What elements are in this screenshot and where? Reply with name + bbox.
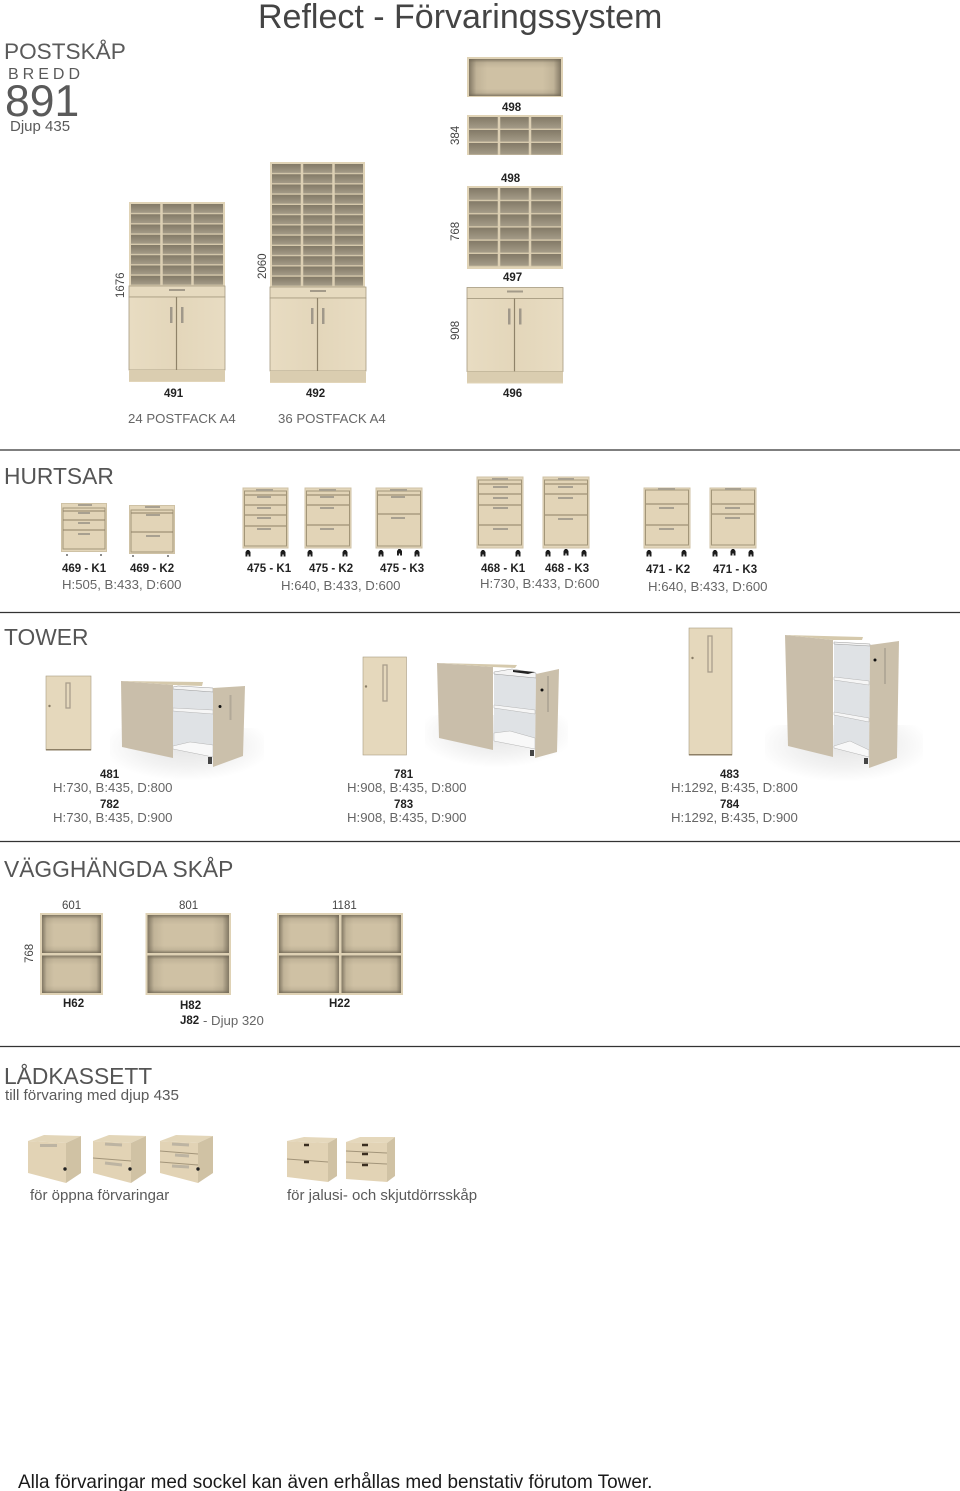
- model numbers: 498: [501, 173, 521, 185]
- drawer captions: [30, 1187, 477, 1204]
- shelf unit 497: [467, 186, 563, 269]
- heading: lådkassett: LÅDKASSETT: [4, 1063, 152, 1089]
- wall cabinet H82: [146, 913, 231, 995]
- pedestal 468-K1: [477, 477, 523, 556]
- pedestal labels: H:505, B:433, D:600: [62, 577, 182, 592]
- shelf unit 498 lower: [467, 115, 563, 155]
- wall cabinet labels: - Djup 320: [203, 1013, 264, 1028]
- tower door 481: [46, 676, 91, 750]
- tower labels: H:730, B:435, D:900: [53, 810, 172, 825]
- tower labels: H:1292, B:435, D:900: [671, 810, 798, 825]
- heading: postskåp: POSTSKÅP: [4, 39, 126, 64]
- width labels: 1181: [332, 900, 357, 912]
- heading: postskåp: Djup 435: [10, 118, 70, 135]
- pedestal labels: 471 - K3: [713, 564, 757, 576]
- dimension labels: 2060: [257, 253, 269, 279]
- tower labels: H:908, B:435, D:800: [347, 780, 466, 795]
- tower labels: 784: [720, 799, 740, 811]
- dimension labels: 908: [450, 321, 462, 340]
- heading: lådkassett: till förvaring med djup 435: [5, 1087, 179, 1104]
- tower labels: H:1292, B:435, D:800: [671, 780, 798, 795]
- model numbers: [164, 102, 522, 400]
- tower labels: [53, 769, 798, 825]
- wall cabinet labels: H22: [329, 998, 350, 1010]
- heading: tower: TOWER: [4, 624, 88, 650]
- cabinet 492: [270, 162, 366, 383]
- heading: postskåp: 891: [5, 77, 79, 126]
- pedestal labels: H:730, B:433, D:600: [480, 576, 600, 591]
- wall cabinet H22: [277, 913, 403, 995]
- wall cabinet labels: J82: [180, 1015, 199, 1027]
- pedestal labels: 475 - K2: [309, 563, 353, 575]
- caption: postfack: 36 POSTFACK A4: [278, 411, 386, 426]
- tower labels: H:730, B:435, D:800: [53, 780, 172, 795]
- pedestal 475-K1: [243, 488, 288, 556]
- tower labels: 481: [100, 769, 120, 781]
- pedestal labels: [62, 563, 768, 594]
- pedestal 471-K2: [644, 488, 690, 556]
- tower open 483: [765, 635, 923, 792]
- tower door 781: [363, 657, 406, 755]
- drawer box 1: [28, 1135, 81, 1183]
- pedestal labels: 475 - K1: [247, 563, 292, 575]
- tower labels: 781: [394, 769, 414, 781]
- model numbers: 498: [502, 102, 522, 114]
- cabinet 491: [129, 202, 225, 382]
- heading: postskåp: [4, 39, 126, 135]
- pedestal labels: 468 - K3: [545, 563, 589, 575]
- width labels: 801: [179, 900, 198, 912]
- drawer box 4: [287, 1137, 337, 1182]
- pedestal 469-K2: [130, 506, 174, 557]
- caption: postfack: 24 POSTFACK A4: [128, 411, 236, 426]
- pedestal labels: H:640, B:433, D:600: [648, 579, 768, 594]
- heading: lådkassett: [4, 1063, 179, 1104]
- drawer captions: för öppna förvaringar: [30, 1187, 169, 1204]
- width labels: 601: [62, 900, 81, 912]
- width labels: [24, 900, 357, 963]
- heading: vägghängda skåp: VÄGGHÄNGDA SKÅP: [4, 856, 233, 882]
- pedestal labels: 475 - K3: [380, 563, 424, 575]
- caption: postfack: [128, 411, 386, 426]
- drawer box 2: [93, 1135, 146, 1183]
- drawer box 3: [160, 1135, 213, 1183]
- width labels: 768: [24, 944, 36, 963]
- heading: hurtsar: HURTSAR: [4, 463, 114, 489]
- pedestal 469-K1: [62, 504, 106, 556]
- pedestal labels: 468 - K1: [481, 563, 526, 575]
- pedestal 475-K2: [305, 488, 351, 556]
- wall cabinet labels: H82: [180, 1000, 201, 1012]
- drawer captions: för jalusi- och skjutdörrsskåp: [287, 1187, 477, 1204]
- dimension labels: 1676: [115, 272, 127, 298]
- heading: postskåp: BREDD: [8, 66, 84, 83]
- dimension labels: 384: [450, 125, 462, 145]
- tower labels: 483: [720, 769, 739, 781]
- wall cabinet H62: [40, 913, 103, 995]
- wall cabinet labels: H62: [63, 998, 84, 1010]
- tower door 483: [689, 628, 732, 756]
- cabinet 496: [467, 288, 563, 384]
- pedestal labels: H:640, B:433, D:600: [281, 578, 400, 593]
- model numbers: 491: [164, 388, 184, 400]
- pedestal 475-K3: [376, 488, 422, 556]
- dimension labels: [115, 125, 462, 340]
- tower labels: H:908, B:435, D:900: [347, 810, 466, 825]
- tower open 481: [110, 681, 264, 790]
- drawer box 5: [346, 1137, 395, 1182]
- pedestal labels: 469 - K2: [130, 563, 174, 575]
- top box 498: [467, 57, 563, 97]
- pedestal 468-K3: [543, 477, 589, 556]
- pedestal labels: 469 - K1: [62, 563, 107, 575]
- model numbers: 497: [503, 272, 522, 284]
- tower open 781: [425, 663, 568, 777]
- model numbers: 496: [503, 388, 522, 400]
- wall cabinet labels: [63, 998, 350, 1028]
- model numbers: 492: [306, 388, 325, 400]
- tower labels: 782: [100, 799, 119, 811]
- tower labels: 783: [394, 799, 413, 811]
- pedestal labels: 471 - K2: [646, 564, 690, 576]
- dimension labels: 768: [450, 222, 462, 241]
- pedestal 471-K3: [710, 488, 756, 556]
